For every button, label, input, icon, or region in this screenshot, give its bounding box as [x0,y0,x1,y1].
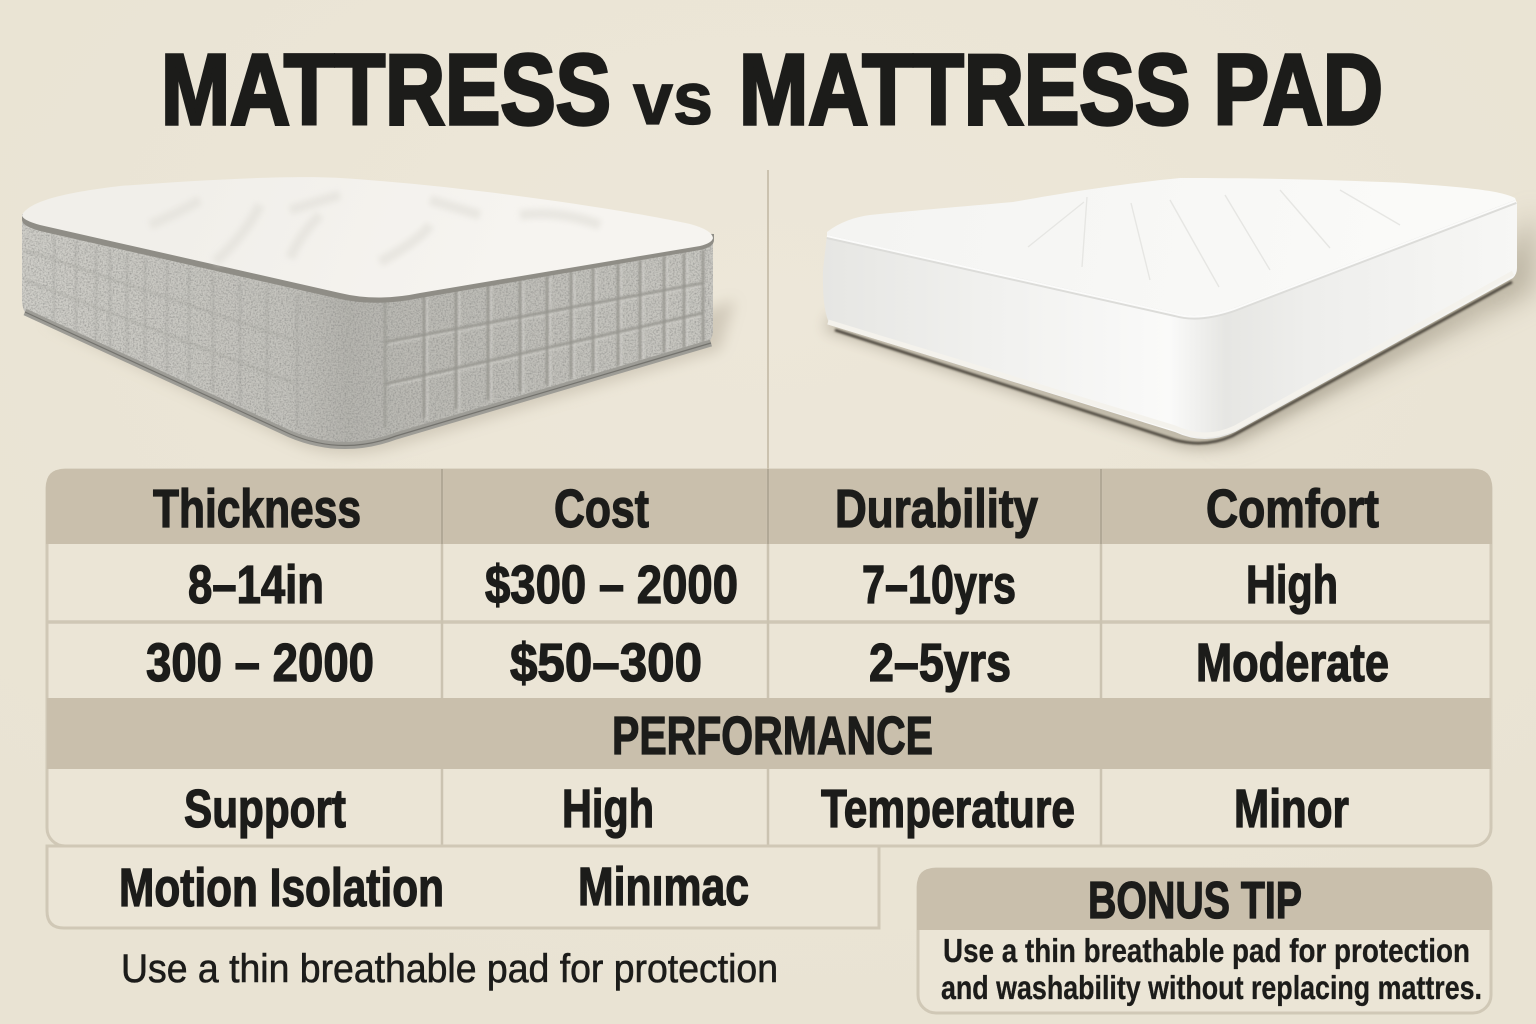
bonus tip header [917,868,1492,930]
performance band [47,698,1491,769]
support row: Minor [1234,779,1349,839]
header labels: Comfort [1206,479,1379,539]
performance heading: PERFORMANCE [612,706,933,766]
header labels: Thickness [153,479,361,539]
support row: Support [184,779,346,839]
support row: Temperature [821,779,1075,839]
header labels: Cost [554,479,649,539]
header labels: Durability [835,479,1038,539]
row lines [47,620,1491,624]
motion isolation labels: Motion Isolation [119,858,444,918]
mattress row [188,555,1338,615]
mattress pad illustration [823,178,1536,450]
pad row: 2–5yrs [869,633,1011,693]
pad piping [827,202,1516,318]
mattress row: 7–10yrs [862,555,1016,615]
header labels [153,479,1379,539]
bonus tip heading: BONUS TIP [1088,872,1302,930]
title [161,34,1383,146]
pad row [146,633,1389,693]
quilted side seam highlights [388,255,706,420]
comparison table [46,469,1492,928]
pad side panels [823,203,1517,439]
footnote text: Use a thin breathable pad for protection [121,947,778,991]
pad row: $50–300 [510,633,702,693]
bonus tip text [941,932,1482,1006]
center divider [767,170,769,470]
motion isolation row [47,846,879,928]
pad quilting lines [1028,190,1400,287]
mattress side panels [22,222,713,445]
pad contact shadow [835,282,1512,443]
quilted side seams [25,236,703,428]
motion isolation labels [119,857,749,918]
bonus tip panel [917,868,1492,1013]
mattress row: $300 – 2000 [485,555,738,615]
mattress illustration [22,177,735,454]
header band [46,469,1492,544]
quilted top [22,177,713,298]
mattress row: 8–14in [188,555,324,615]
pad row: Moderate [1196,633,1389,693]
mattress row: High [1246,555,1338,615]
support row [184,779,1349,839]
motion isolation labels: Minımac [578,857,749,917]
bottom piping [25,312,711,446]
title: vs [633,57,713,140]
support row: High [562,779,654,839]
pad quilted top [827,178,1517,318]
bonus tip box [918,869,1491,1013]
top piping [22,214,714,303]
title: MATTRESS PAD [739,34,1383,146]
title: MATTRESS [161,34,611,146]
pad row: 300 – 2000 [146,633,374,693]
table body [47,470,1491,846]
